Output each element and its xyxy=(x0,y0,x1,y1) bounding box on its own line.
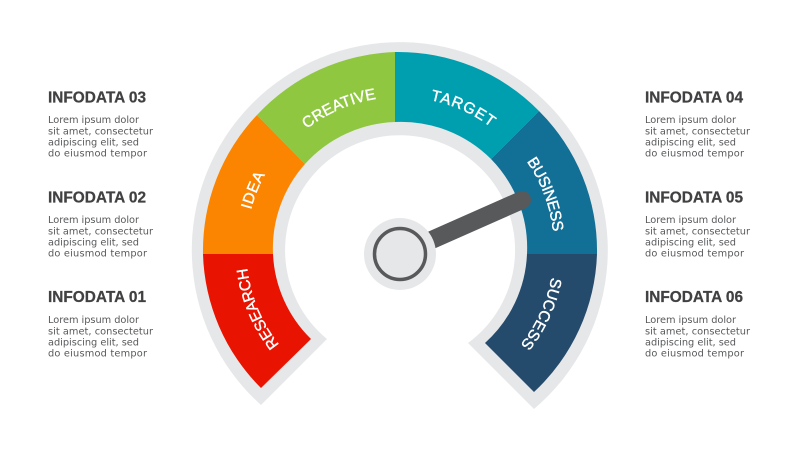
segment: creative xyxy=(257,52,395,164)
text block: infodata 03: Lorem ipsum dolor xyxy=(48,115,140,126)
text block: infodata 05: Lorem ipsum dolor xyxy=(645,215,737,226)
gauge needle xyxy=(400,200,522,254)
text block: infodata 05: sit amet, consectetur xyxy=(645,226,751,238)
segment: research: RESEARCH xyxy=(236,269,279,350)
text block: infodata 01: sit amet, consectetur xyxy=(48,326,154,338)
text block: infodata 01 xyxy=(48,289,154,360)
text block: infodata 04: adipiscing elit, sed xyxy=(645,138,736,148)
text block: infodata 01: adipiscing elit, sed xyxy=(48,338,139,348)
text block: infodata 03: sit amet, consectetur xyxy=(48,126,154,138)
text block: infodata 03: INFODATA 03 xyxy=(48,90,146,106)
text block: infodata 05: adipiscing elit, sed xyxy=(645,238,736,248)
text block: infodata 05 xyxy=(645,190,751,260)
text block: infodata 01: INFODATA 01 xyxy=(48,289,146,306)
segment: creative: CREATIVE xyxy=(302,88,376,127)
segment: target: TARGET xyxy=(432,90,497,125)
text block: infodata 02: do eiusmod tempor xyxy=(48,248,148,260)
text block: infodata 06: adipiscing elit, sed xyxy=(645,338,736,348)
segment: success xyxy=(485,254,597,392)
text block: infodata 02: sit amet, consectetur xyxy=(48,226,154,238)
segment: research xyxy=(203,254,311,388)
text block: infodata 05: INFODATA 05 xyxy=(645,190,743,206)
gauge backing ring xyxy=(192,42,608,409)
text block: infodata 06: INFODATA 06 xyxy=(645,289,743,306)
text block: infodata 04: do eiusmod tempor xyxy=(645,148,745,160)
text block: infodata 05: do eiusmod tempor xyxy=(645,248,745,260)
segment: business xyxy=(491,111,598,254)
text block: infodata 04: sit amet, consectetur xyxy=(645,126,751,138)
text block: infodata 06: do eiusmod tempor xyxy=(645,348,745,360)
segment: idea: IDEA xyxy=(240,174,266,209)
text block: infodata 06 xyxy=(645,289,751,360)
segment: success: SUCCESS xyxy=(522,278,562,350)
text block: infodata 02: Lorem ipsum dolor xyxy=(48,215,140,226)
text block: infodata 03 xyxy=(48,90,154,160)
text block: infodata 04 xyxy=(645,90,751,160)
segment: target xyxy=(395,52,539,159)
gauge hub xyxy=(364,218,436,290)
text block: infodata 01: do eiusmod tempor xyxy=(48,348,148,360)
segment: business: BUSINESS xyxy=(527,156,564,231)
text block: infodata 04: Lorem ipsum dolor xyxy=(645,115,737,126)
segment: idea xyxy=(202,115,305,254)
text block: infodata 02: adipiscing elit, sed xyxy=(48,238,139,248)
text block: infodata 06: sit amet, consectetur xyxy=(645,326,751,338)
text block: infodata 02 xyxy=(48,190,154,260)
text block: infodata 06: Lorem ipsum dolor xyxy=(645,315,737,326)
text block: infodata 02: INFODATA 02 xyxy=(48,190,146,206)
text block: infodata 03: do eiusmod tempor xyxy=(48,148,148,160)
text block: infodata 01: Lorem ipsum dolor xyxy=(48,315,140,326)
text block: infodata 04: INFODATA 04 xyxy=(645,90,743,106)
text block: infodata 03: adipiscing elit, sed xyxy=(48,138,139,148)
